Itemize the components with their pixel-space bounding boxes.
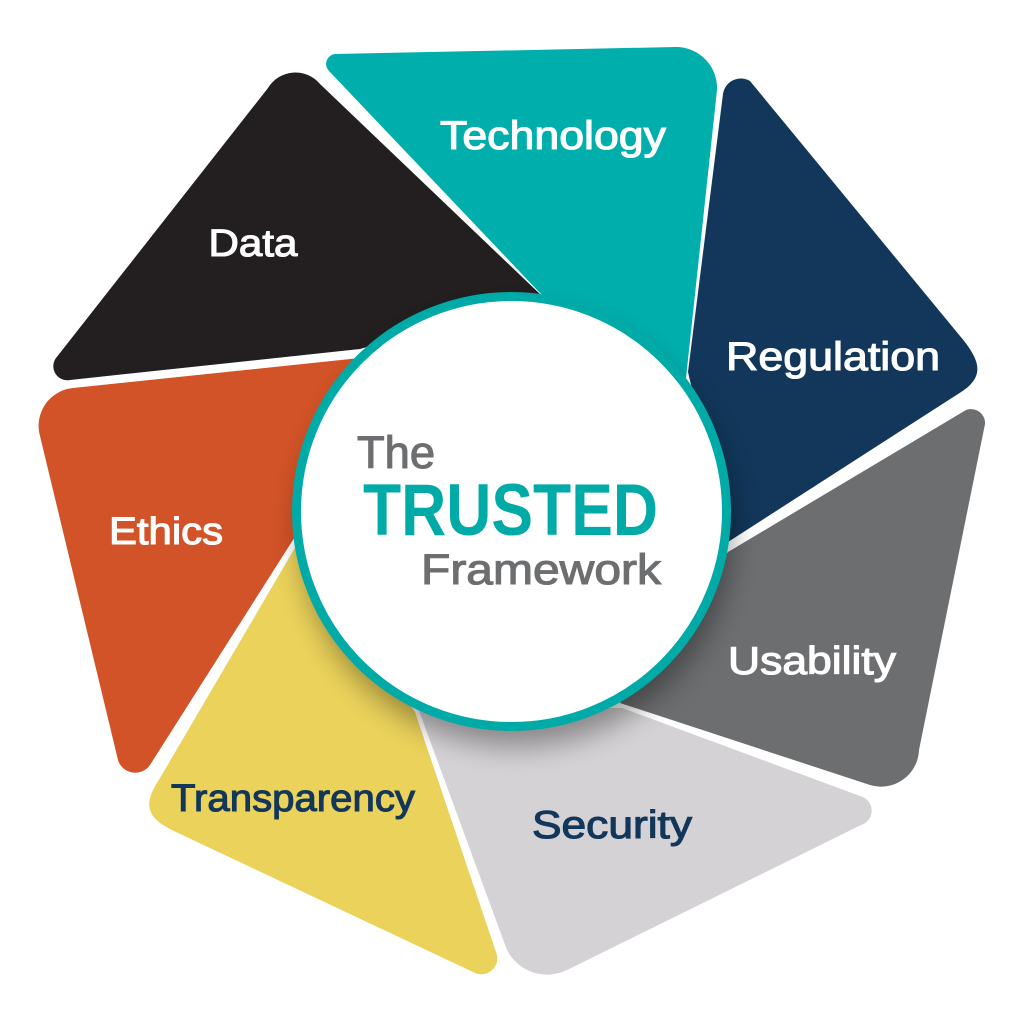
title: Framework: Framework [421,546,662,594]
segment: Transparency: Transparency [171,778,415,820]
segment: Usability: Usability [728,640,897,683]
segment: Data [53,72,542,380]
segment: Regulation: Regulation [726,335,940,379]
segment: Transparency [149,546,497,974]
segment: Regulation [688,78,977,542]
title: The: The [357,427,435,478]
segment: Technology [326,47,717,378]
segment: Ethics [39,358,360,773]
segment: Usability [620,409,985,787]
segment: Data: Data [208,223,298,265]
title: TRUSTED: TRUSTED [363,470,658,551]
center shadow [300,314,732,746]
center circle [296,296,726,726]
segment: Security: Security [532,804,693,847]
segment: Security [418,708,872,975]
segment: Technology: Technology [440,114,666,158]
segment: Ethics: Ethics [109,511,223,553]
